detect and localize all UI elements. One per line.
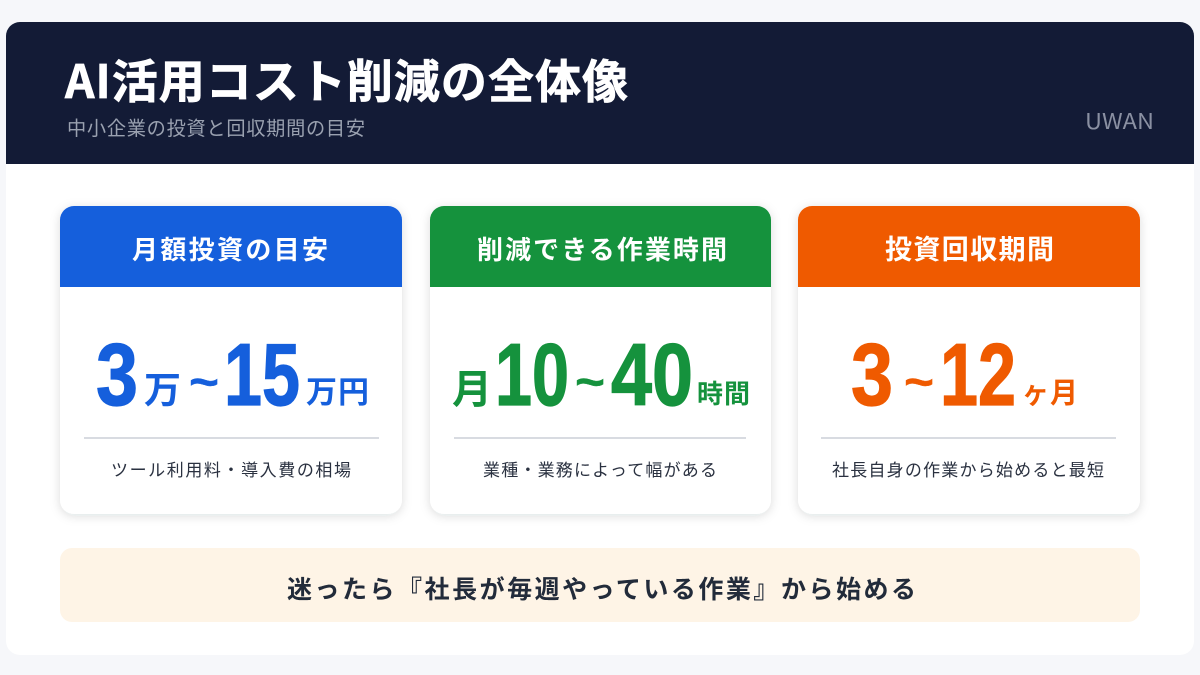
subtitle: 中小企業の投資と回収期間の目安	[67, 113, 365, 141]
big value	[851, 325, 1078, 424]
big value: 12	[940, 325, 1016, 424]
big value: 万	[144, 360, 181, 414]
big value: 15	[224, 325, 300, 424]
big value: ~	[189, 356, 219, 409]
panel: hours saved	[430, 206, 771, 514]
big value	[96, 325, 369, 424]
big value: 月	[1050, 370, 1078, 412]
card header: blue	[60, 206, 402, 287]
big value: 時間	[697, 374, 750, 411]
card heading: 削減できる作業時間	[477, 230, 727, 267]
card heading: 月額投資の目安	[132, 230, 328, 267]
big value	[452, 325, 750, 424]
header band	[6, 22, 1194, 164]
callout text: 迷ったら『社長が毎週やっている作業』から始める	[287, 570, 916, 606]
big value: 3	[851, 325, 893, 424]
card note: ツール利用料・導入費の相場	[111, 456, 351, 481]
brand name: UWAN	[1085, 105, 1154, 136]
big value: ~	[575, 356, 605, 409]
card heading: 投資回収期間	[885, 228, 1054, 267]
title: AI活用コスト削減の全体像	[64, 46, 628, 112]
panel: monthly investment	[60, 206, 402, 514]
big value: 10	[495, 325, 569, 424]
big value: ~	[904, 356, 934, 409]
big value: 万円	[306, 367, 369, 412]
card note: 業種・業務によって幅がある	[483, 456, 717, 481]
panel: payback period	[798, 206, 1140, 514]
card header: green	[430, 206, 771, 287]
big value: 月	[452, 357, 492, 415]
big value: ヶ	[1022, 370, 1049, 412]
big value: 40	[611, 325, 693, 424]
card note: 社長自身の作業から始めると最短	[832, 456, 1104, 481]
callout banner	[60, 548, 1140, 622]
card header: orange	[798, 206, 1140, 287]
big value: 3	[96, 325, 138, 424]
